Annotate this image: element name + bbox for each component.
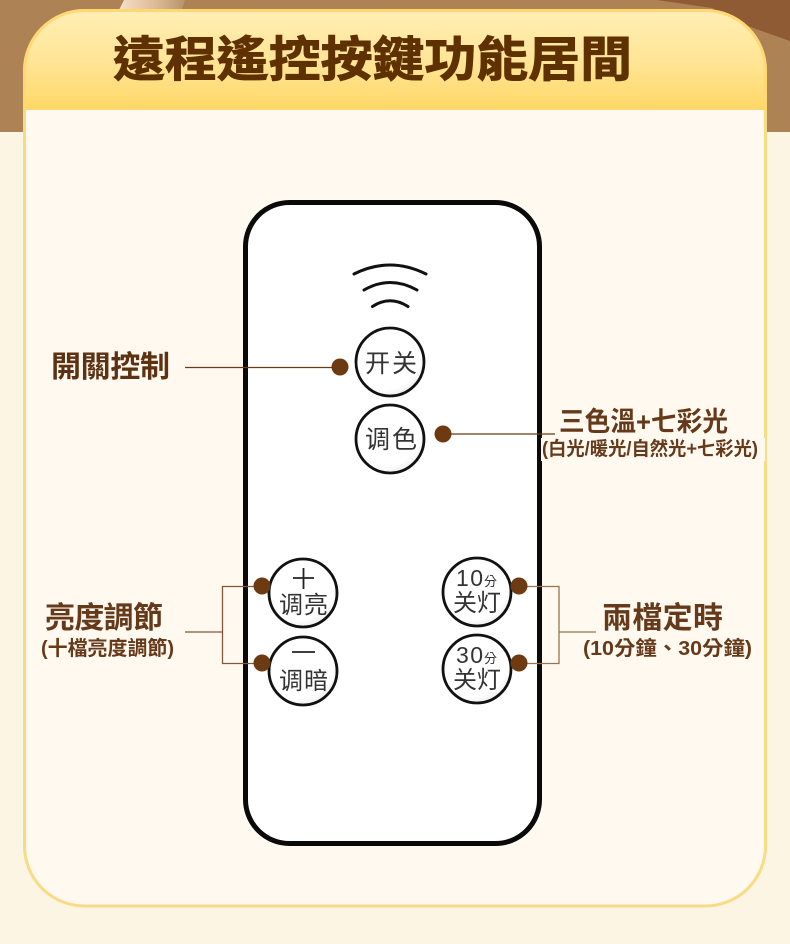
- button: brightness down: 调暗: [279, 668, 328, 695]
- callout label: 開關控制: [51, 351, 170, 384]
- marker dot: [434, 426, 452, 442]
- button: brightness up: [269, 559, 337, 627]
- callout label: 兩檔定時: [602, 602, 723, 635]
- leader line: [443, 433, 555, 435]
- bracket: [519, 586, 596, 664]
- bracket: [185, 586, 262, 664]
- button: 30 minute timer: 关灯: [453, 667, 501, 694]
- button: colour: 调 色: [365, 426, 417, 454]
- button: power: 开 关: [365, 350, 417, 378]
- subtitle backing: [541, 438, 765, 461]
- callout sublabel: (十檔亮度調節): [41, 636, 174, 660]
- button: 10 minute timer: [443, 558, 511, 626]
- remote control body: [246, 202, 540, 844]
- callout label: 三色溫+七彩光: [559, 407, 728, 437]
- callout: timer: [510, 578, 752, 672]
- panel header band: [24, 10, 766, 110]
- callout label: 亮度調節: [45, 602, 163, 635]
- button: colour: [356, 405, 424, 473]
- marker dot: 10 minutes: [510, 578, 528, 594]
- button: 10 minute timer: 分: [484, 574, 497, 589]
- title: 遠程遙控按鍵功能居間: [113, 34, 632, 87]
- marker dot: up: [254, 578, 270, 594]
- callout: brightness: [41, 578, 270, 672]
- button: power: [356, 328, 424, 396]
- marker dot: 30 minutes: [510, 654, 528, 672]
- button: brightness down: [269, 637, 337, 705]
- icon: infrared signal waves: [354, 265, 426, 306]
- callout sublabel: (10分鐘、30分鐘): [583, 637, 752, 660]
- leader line: [185, 366, 340, 368]
- callout sublabel: (白光/暖光/自然光+七彩光): [542, 437, 758, 460]
- callout: colour temperature: [434, 407, 765, 461]
- button: 10 minute timer: 关灯: [453, 590, 501, 617]
- marker dot: [332, 358, 348, 376]
- button: brightness up: 调亮: [279, 592, 328, 619]
- button: 30 minute timer: 30: [456, 642, 483, 668]
- marker dot: down: [254, 654, 270, 672]
- header base cover: [26, 110, 764, 116]
- button: 30 minute timer: [443, 635, 511, 703]
- button: 10 minute timer: 10: [456, 565, 483, 591]
- button: 30 minute timer: 分: [484, 651, 497, 666]
- callout: power switch: [51, 351, 348, 384]
